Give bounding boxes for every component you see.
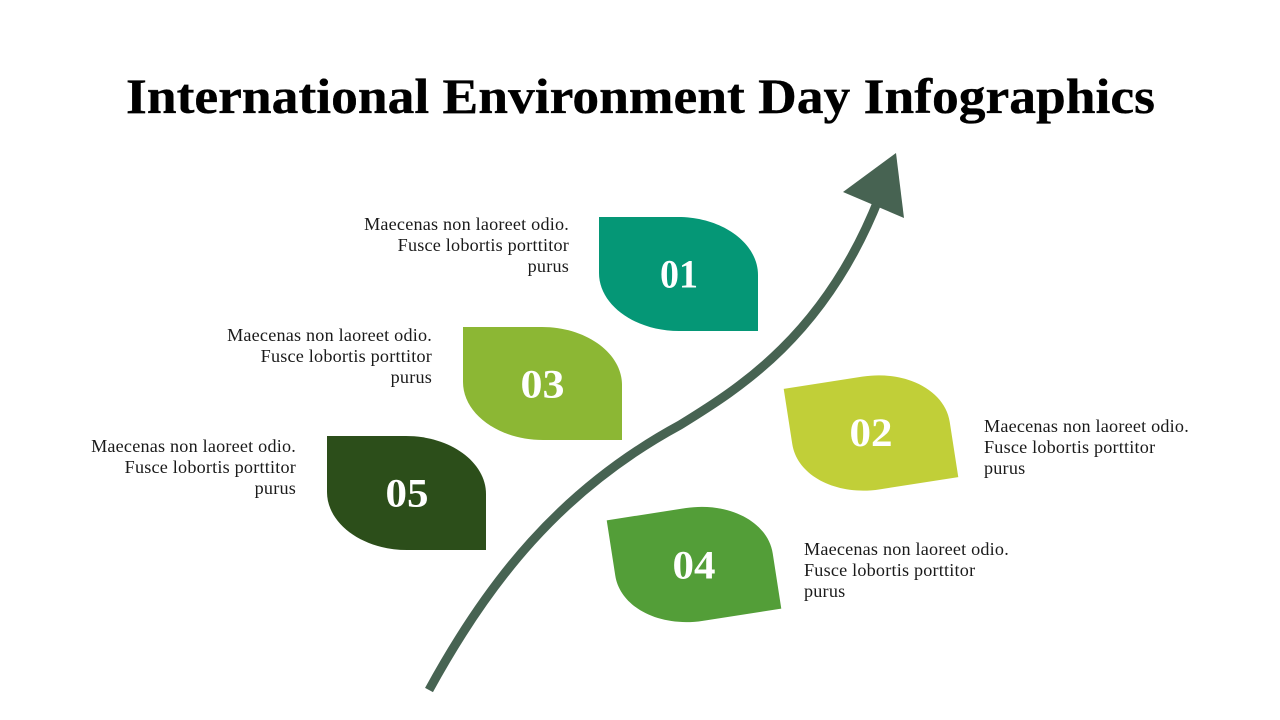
leaf 04: [607, 496, 781, 633]
text block 01: Maecenas non laoreet odio.: [364, 214, 569, 234]
leaf 04: 04: [672, 542, 716, 588]
text block 04: [804, 539, 1009, 601]
text block 03: purus: [391, 367, 432, 387]
leaf 05: [327, 436, 486, 550]
leaf 01: [599, 217, 758, 331]
leaf 02: [784, 365, 958, 501]
leaf 03: 03: [520, 362, 564, 406]
text block 05: Fusce lobortis porttitor: [125, 457, 296, 477]
text block 04: purus: [804, 581, 845, 601]
leaf 03: [463, 327, 622, 440]
arrow: [429, 153, 904, 690]
leaf 01: 01: [660, 252, 698, 296]
text block 04: Maecenas non laoreet odio.: [804, 539, 1009, 559]
text block 01: purus: [528, 256, 569, 276]
text block 02: Fusce lobortis porttitor: [984, 437, 1155, 457]
text block 02: purus: [984, 458, 1025, 478]
text block 03: Fusce lobortis porttitor: [261, 346, 432, 366]
title: International Environment Day Infographics: [126, 68, 1155, 124]
text block 03: [227, 325, 432, 387]
text block 02: Maecenas non laoreet odio.: [984, 416, 1189, 436]
leaf 02: 02: [850, 410, 892, 455]
text block 02: [984, 416, 1189, 478]
text block 05: purus: [255, 478, 296, 498]
text block 01: Fusce lobortis porttitor: [398, 235, 569, 255]
text block 05: [91, 436, 296, 498]
text block 05: Maecenas non laoreet odio.: [91, 436, 296, 456]
text block 04: Fusce lobortis porttitor: [804, 560, 975, 580]
leaf 05: 05: [386, 470, 428, 516]
text block 03: Maecenas non laoreet odio.: [227, 325, 432, 345]
text block 01: [364, 214, 569, 276]
